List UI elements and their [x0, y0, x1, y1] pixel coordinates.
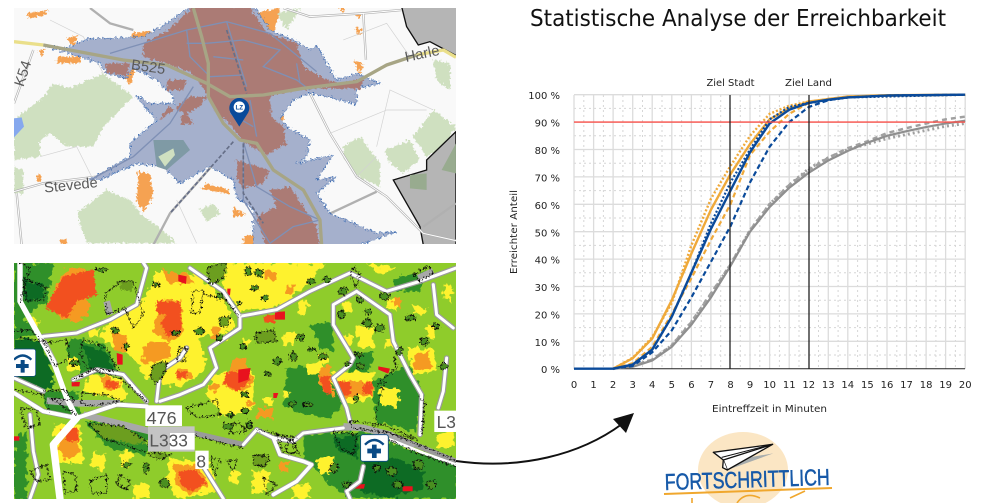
chart: y axis labels	[528, 91, 560, 376]
arrow: from map to chart	[456, 413, 634, 464]
curve: blue solid	[574, 95, 965, 369]
map: orange zones	[53, 268, 432, 495]
chart: major grid	[574, 95, 965, 369]
map: green tint in isochrone	[153, 140, 190, 170]
chart: x axis labels: 12	[802, 380, 815, 391]
chart: y axis labels: 50 %	[535, 228, 560, 240]
map: rescue coverage heat map	[8, 263, 458, 499]
map: place labels: Harle	[403, 43, 441, 66]
chart: x axis labels: 11	[783, 380, 796, 391]
badge: orange underline	[664, 488, 832, 494]
curve: grey dotted	[613, 123, 965, 369]
map: road number labels: 476	[147, 408, 177, 428]
chart: target line rural	[808, 95, 810, 369]
map: road number labels: 8	[196, 451, 206, 471]
curve: blue dotted	[613, 95, 965, 369]
icon: paper airplane	[713, 444, 773, 470]
chart: y axis labels: 60 %	[535, 201, 560, 212]
chart: x axis labels: 16	[881, 380, 893, 391]
chart: x axis labels: 17	[900, 380, 913, 391]
curve: orange dashed	[613, 95, 965, 369]
chart: data curves	[574, 95, 965, 369]
map: place labels: K54	[12, 59, 35, 89]
map: road number labels	[145, 405, 458, 471]
map: main roads	[14, 8, 456, 245]
chart: cumulative arrival time curves	[509, 78, 972, 415]
map: red-orange zones	[45, 270, 373, 491]
map: place labels: Stevede	[43, 175, 99, 197]
chart: target labels: Ziel Land	[785, 78, 832, 89]
chart: x axis labels: 4	[649, 380, 655, 391]
chart: minor grid	[574, 95, 965, 369]
badge: handwritten word: FORTSCHRITTLICH	[664, 464, 830, 495]
chart: x axis labels: 8	[727, 380, 734, 391]
curve: orange dotted	[613, 95, 965, 369]
map: green land areas	[14, 8, 456, 243]
chart: x axis line	[574, 368, 965, 370]
chart: x axis labels: 1	[590, 380, 597, 391]
badge: orange dashes	[692, 491, 805, 503]
chart: x axis labels: 6	[688, 380, 695, 391]
chart: target labels	[706, 78, 832, 89]
curve: grey dashed	[613, 117, 965, 369]
map: dashed forest outlines	[14, 263, 458, 495]
title: Statistische Analyse der Erreichbarkeit	[530, 4, 946, 32]
map: place labels	[12, 43, 441, 197]
map: dark green zones	[14, 263, 457, 499]
badge: orange watercolor blob	[698, 432, 788, 503]
map: blue street network	[90, 22, 320, 243]
chart: x axis labels: 18	[920, 380, 932, 391]
map: white roads	[14, 263, 456, 499]
map: blue isochrone area	[43, 5, 397, 248]
chart: y axis labels: 40 %	[535, 256, 560, 266]
chart: x axis title: Eintreffzeit in Minuten	[712, 404, 827, 415]
chart: y axis title: Erreichter Anteil	[509, 190, 520, 274]
chart: y axis labels: 30 %	[535, 283, 560, 294]
chart: x axis labels: 19	[939, 380, 952, 391]
chart: x axis labels: 10	[763, 380, 776, 391]
chart: y axis labels: 10 %	[535, 338, 560, 349]
chart: x axis labels: 7	[708, 380, 714, 391]
map: lake	[14, 117, 24, 137]
chart: y axis labels: 80 %	[535, 146, 560, 157]
map: darkest green zones	[14, 278, 423, 499]
chart: target labels: Ziel Stadt	[706, 78, 755, 89]
chart: y axis labels: 20 %	[535, 310, 560, 322]
icon: hospital right	[361, 435, 388, 461]
icon: hospital left	[14, 348, 36, 377]
chart: x axis labels: 2	[610, 380, 616, 391]
chart: x axis labels	[571, 380, 972, 391]
map: road casings	[14, 263, 456, 499]
map: road number labels: L333	[149, 431, 188, 451]
chart: x axis labels: 14	[841, 380, 854, 391]
map: thin minor roads	[40, 20, 433, 243]
badge: fortschrittlich	[664, 432, 832, 503]
chart: target line city	[729, 95, 731, 369]
map: neighbouring district	[393, 7, 458, 245]
map: thick grey road segments	[43, 271, 433, 448]
map: outer roads	[14, 8, 456, 245]
curve: orange solid	[613, 95, 965, 369]
chart: x axis labels: 15	[861, 380, 874, 391]
map: road number labels: L3	[437, 412, 456, 432]
map: olive forest patches	[90, 263, 277, 466]
map: red hot spots	[14, 275, 413, 491]
chart: x axis labels: 0	[571, 380, 577, 391]
chart: y axis labels: 0 %	[541, 365, 560, 376]
chart: 90 percent target line	[574, 121, 965, 123]
chart: y axis labels: 90 %	[535, 118, 560, 130]
chart: x axis labels: 20	[959, 380, 972, 391]
chart: y axis labels: 70 %	[535, 174, 560, 184]
map: orange coverage patches	[27, 8, 363, 245]
map: isochrone street map	[12, 5, 458, 248]
map: brown inner coverage area	[105, 7, 363, 248]
map: small black forest blobs	[70, 267, 448, 489]
curve: grey solid	[613, 121, 965, 369]
map: place labels: B525	[130, 57, 166, 78]
chart: x axis labels: 9	[747, 380, 753, 391]
map: railway	[170, 30, 263, 223]
chart: x axis labels: 3	[630, 380, 636, 391]
chart: y axis labels: 100 %	[528, 91, 560, 102]
map: yellow zones	[30, 263, 453, 499]
icon: location pin: LZ	[235, 104, 243, 111]
curve: blue dashed	[613, 95, 965, 369]
chart: x axis labels: 13	[822, 380, 835, 391]
icon: location pin	[229, 98, 249, 127]
chart: x axis labels: 5	[669, 380, 675, 391]
